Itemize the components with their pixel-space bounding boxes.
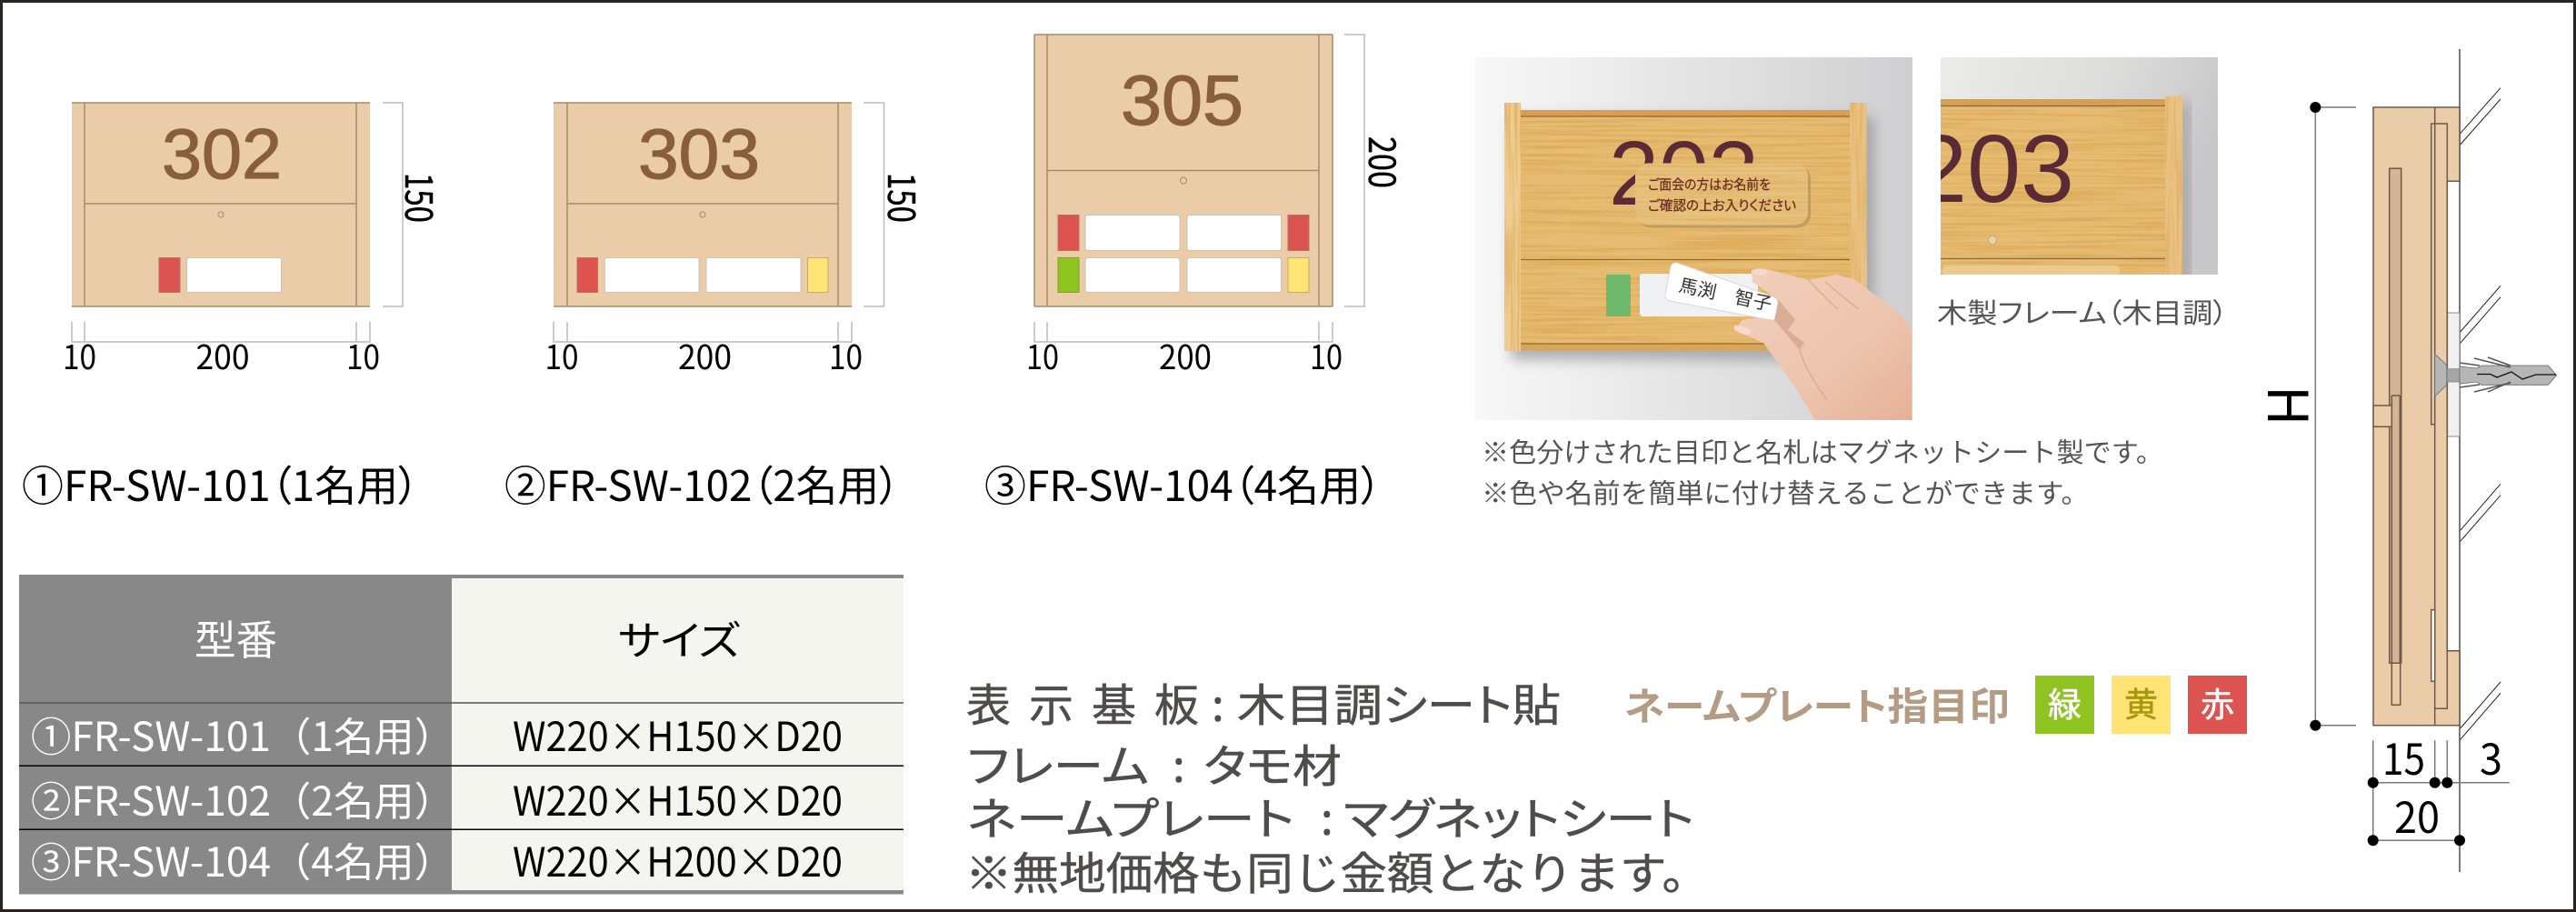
caption: wooden frame: 木製フレーム（木目調） — [1937, 291, 2228, 331]
red marker top right — [1288, 215, 1309, 251]
badge: yellow: 黄 — [2124, 677, 2158, 727]
small block — [2373, 406, 2391, 426]
plain price note: ※無地価格も同じ金額となります。 — [965, 838, 1709, 903]
frame body — [2373, 107, 2460, 726]
photo: wooden frame detail — [1941, 57, 2218, 275]
depth dimensions 15, 3, 20 — [2368, 725, 2510, 846]
width dimension 10 200 10: 10 — [63, 330, 96, 379]
width dimension 10 200 10 — [545, 322, 863, 379]
width dimension 10 200 10: 10 — [1310, 330, 1343, 379]
model caption 1: ①FR-SW-101（1名用） — [22, 454, 419, 514]
yellow marker — [807, 258, 828, 293]
width dimension 10 200 10: 10 — [545, 330, 578, 379]
depth dimensions 15, 3, 20: 3 — [2480, 725, 2502, 787]
width dimension 10 200 10: 10 — [1026, 330, 1059, 379]
badge: green: 緑 — [2048, 677, 2082, 727]
model caption 2: ②FR-SW-102（2名用） — [504, 454, 900, 514]
depth dimensions 15, 3, 20: 15 — [2382, 725, 2425, 787]
height dimension H — [2252, 102, 2356, 731]
table backgrounds — [19, 575, 904, 895]
panel: FR-SW-102 sign front view — [504, 103, 932, 514]
width dimension 10 200 10 — [63, 322, 380, 379]
height dimension 150: 150 — [877, 173, 932, 223]
header: model: 型番 — [195, 607, 277, 666]
width dimension 10 200 10: 200 — [678, 330, 732, 379]
lifted name plate: 馬渕 智子 — [1677, 271, 1775, 316]
frame material: : — [1173, 731, 1185, 796]
sign plate 305 — [1034, 35, 1333, 306]
name plate right — [706, 258, 801, 293]
name plate material — [967, 784, 1694, 848]
model caption 3: ③FR-SW-104（4名用） — [984, 454, 1382, 514]
display board material: 木目調シート貼 — [1237, 670, 1561, 735]
room number 303: 303 — [638, 114, 760, 194]
height dimension 200 — [1344, 35, 1411, 306]
white slot — [2431, 610, 2435, 681]
width dimension 10 200 10: 200 — [1159, 330, 1212, 379]
panel: FR-SW-101 sign front view — [22, 103, 449, 514]
frame material: タモ材 — [1203, 731, 1342, 796]
white name plate — [1640, 274, 1758, 316]
green magnet marker — [1606, 275, 1631, 316]
height dimension 150 — [864, 103, 932, 306]
note: magnet sheet: ※色分けされた目印と名札はマグネットシート製です。 — [1482, 432, 2163, 470]
name plate material: ネームプレート — [967, 784, 1294, 848]
frame material — [967, 731, 1342, 796]
name plate left — [605, 258, 699, 293]
row 1 size: W220×H150×D20 — [513, 705, 843, 763]
room number 203: 203 — [1913, 115, 2074, 223]
green marker — [1058, 258, 1079, 293]
height dimension H: H — [2252, 386, 2332, 426]
legend label: ネームプレート指目印 — [1624, 676, 2010, 732]
sign shadow — [1511, 116, 1874, 360]
name plate material: : — [1321, 784, 1333, 848]
height dimension 150 — [383, 103, 449, 306]
red marker — [159, 258, 180, 293]
width dimension 10 200 10: 10 — [829, 330, 863, 379]
section drawing — [2252, 49, 2557, 872]
sign plate 303 — [554, 103, 852, 306]
panel: FR-SW-104 sign front view — [984, 35, 1411, 514]
width dimension 10 200 10 — [1026, 322, 1343, 379]
name plate bottom right — [1187, 258, 1282, 293]
badge: green — [2035, 676, 2094, 734]
wall hatching — [2461, 88, 2501, 739]
notice tag: ご確認の上お入りください — [1648, 195, 1796, 215]
row 2 model: ②FR-SW-102（2名用） — [31, 769, 454, 827]
wall mount plate — [2447, 313, 2460, 436]
header: size: サイズ — [618, 608, 740, 666]
depth dimensions 15, 3, 20: 20 — [2394, 783, 2440, 846]
lower inner plate — [2391, 396, 2401, 705]
wooden frame — [1941, 96, 2182, 276]
materials text block — [965, 670, 1709, 903]
row 3 size: W220×H200×D20 — [513, 830, 843, 888]
room number 203 behind tag: 203 — [1609, 123, 1759, 225]
hand — [1732, 269, 1912, 420]
display board material: : — [1212, 670, 1224, 735]
frame shadow — [2182, 98, 2192, 275]
badge: red — [2188, 676, 2247, 734]
sign plate 302 — [72, 103, 370, 306]
yellow marker — [1288, 258, 1309, 293]
name plate material: マグネットシート — [1343, 784, 1694, 848]
row 1 model: ①FR-SW-101（1名用） — [31, 705, 454, 763]
badge: red: 赤 — [2201, 677, 2234, 727]
name plate top right — [1187, 215, 1282, 251]
height dimension 200: 200 — [1358, 136, 1411, 188]
height dimension 150: 150 — [394, 173, 449, 223]
name plate bottom left — [1085, 258, 1180, 293]
red marker — [577, 258, 598, 293]
width dimension 10 200 10: 200 — [196, 330, 249, 379]
wooden sign board — [1504, 103, 1867, 351]
note: easy replacement: ※色や名前を簡単に付け替えることができます。 — [1482, 473, 2089, 511]
name plate — [187, 258, 282, 293]
notice tag: ご面会の方はお名前を — [1648, 175, 1771, 194]
name plate top left — [1085, 215, 1180, 251]
notice tag — [1635, 164, 1811, 227]
row 3 model: ③FR-SW-104（4名用） — [31, 830, 454, 888]
width dimension 10 200 10: 10 — [346, 330, 380, 379]
size table — [19, 575, 904, 895]
room number 302: 302 — [162, 114, 282, 194]
row 2 size: W220×H150×D20 — [513, 769, 843, 827]
wall anchor and screw — [2435, 354, 2557, 396]
display plate — [2390, 168, 2401, 663]
frame material: フレーム — [967, 731, 1149, 796]
display board material: 表示基板 — [966, 670, 1199, 735]
wall line — [2459, 49, 2461, 872]
badge: yellow — [2112, 676, 2171, 734]
room number 305: 305 — [1121, 60, 1243, 140]
red marker top left — [1058, 215, 1079, 251]
name plate marker legend — [1624, 676, 2247, 734]
lifted name plate — [1665, 263, 1778, 320]
display board material — [966, 670, 1561, 735]
photo: hand changing name plate — [1475, 57, 1912, 420]
